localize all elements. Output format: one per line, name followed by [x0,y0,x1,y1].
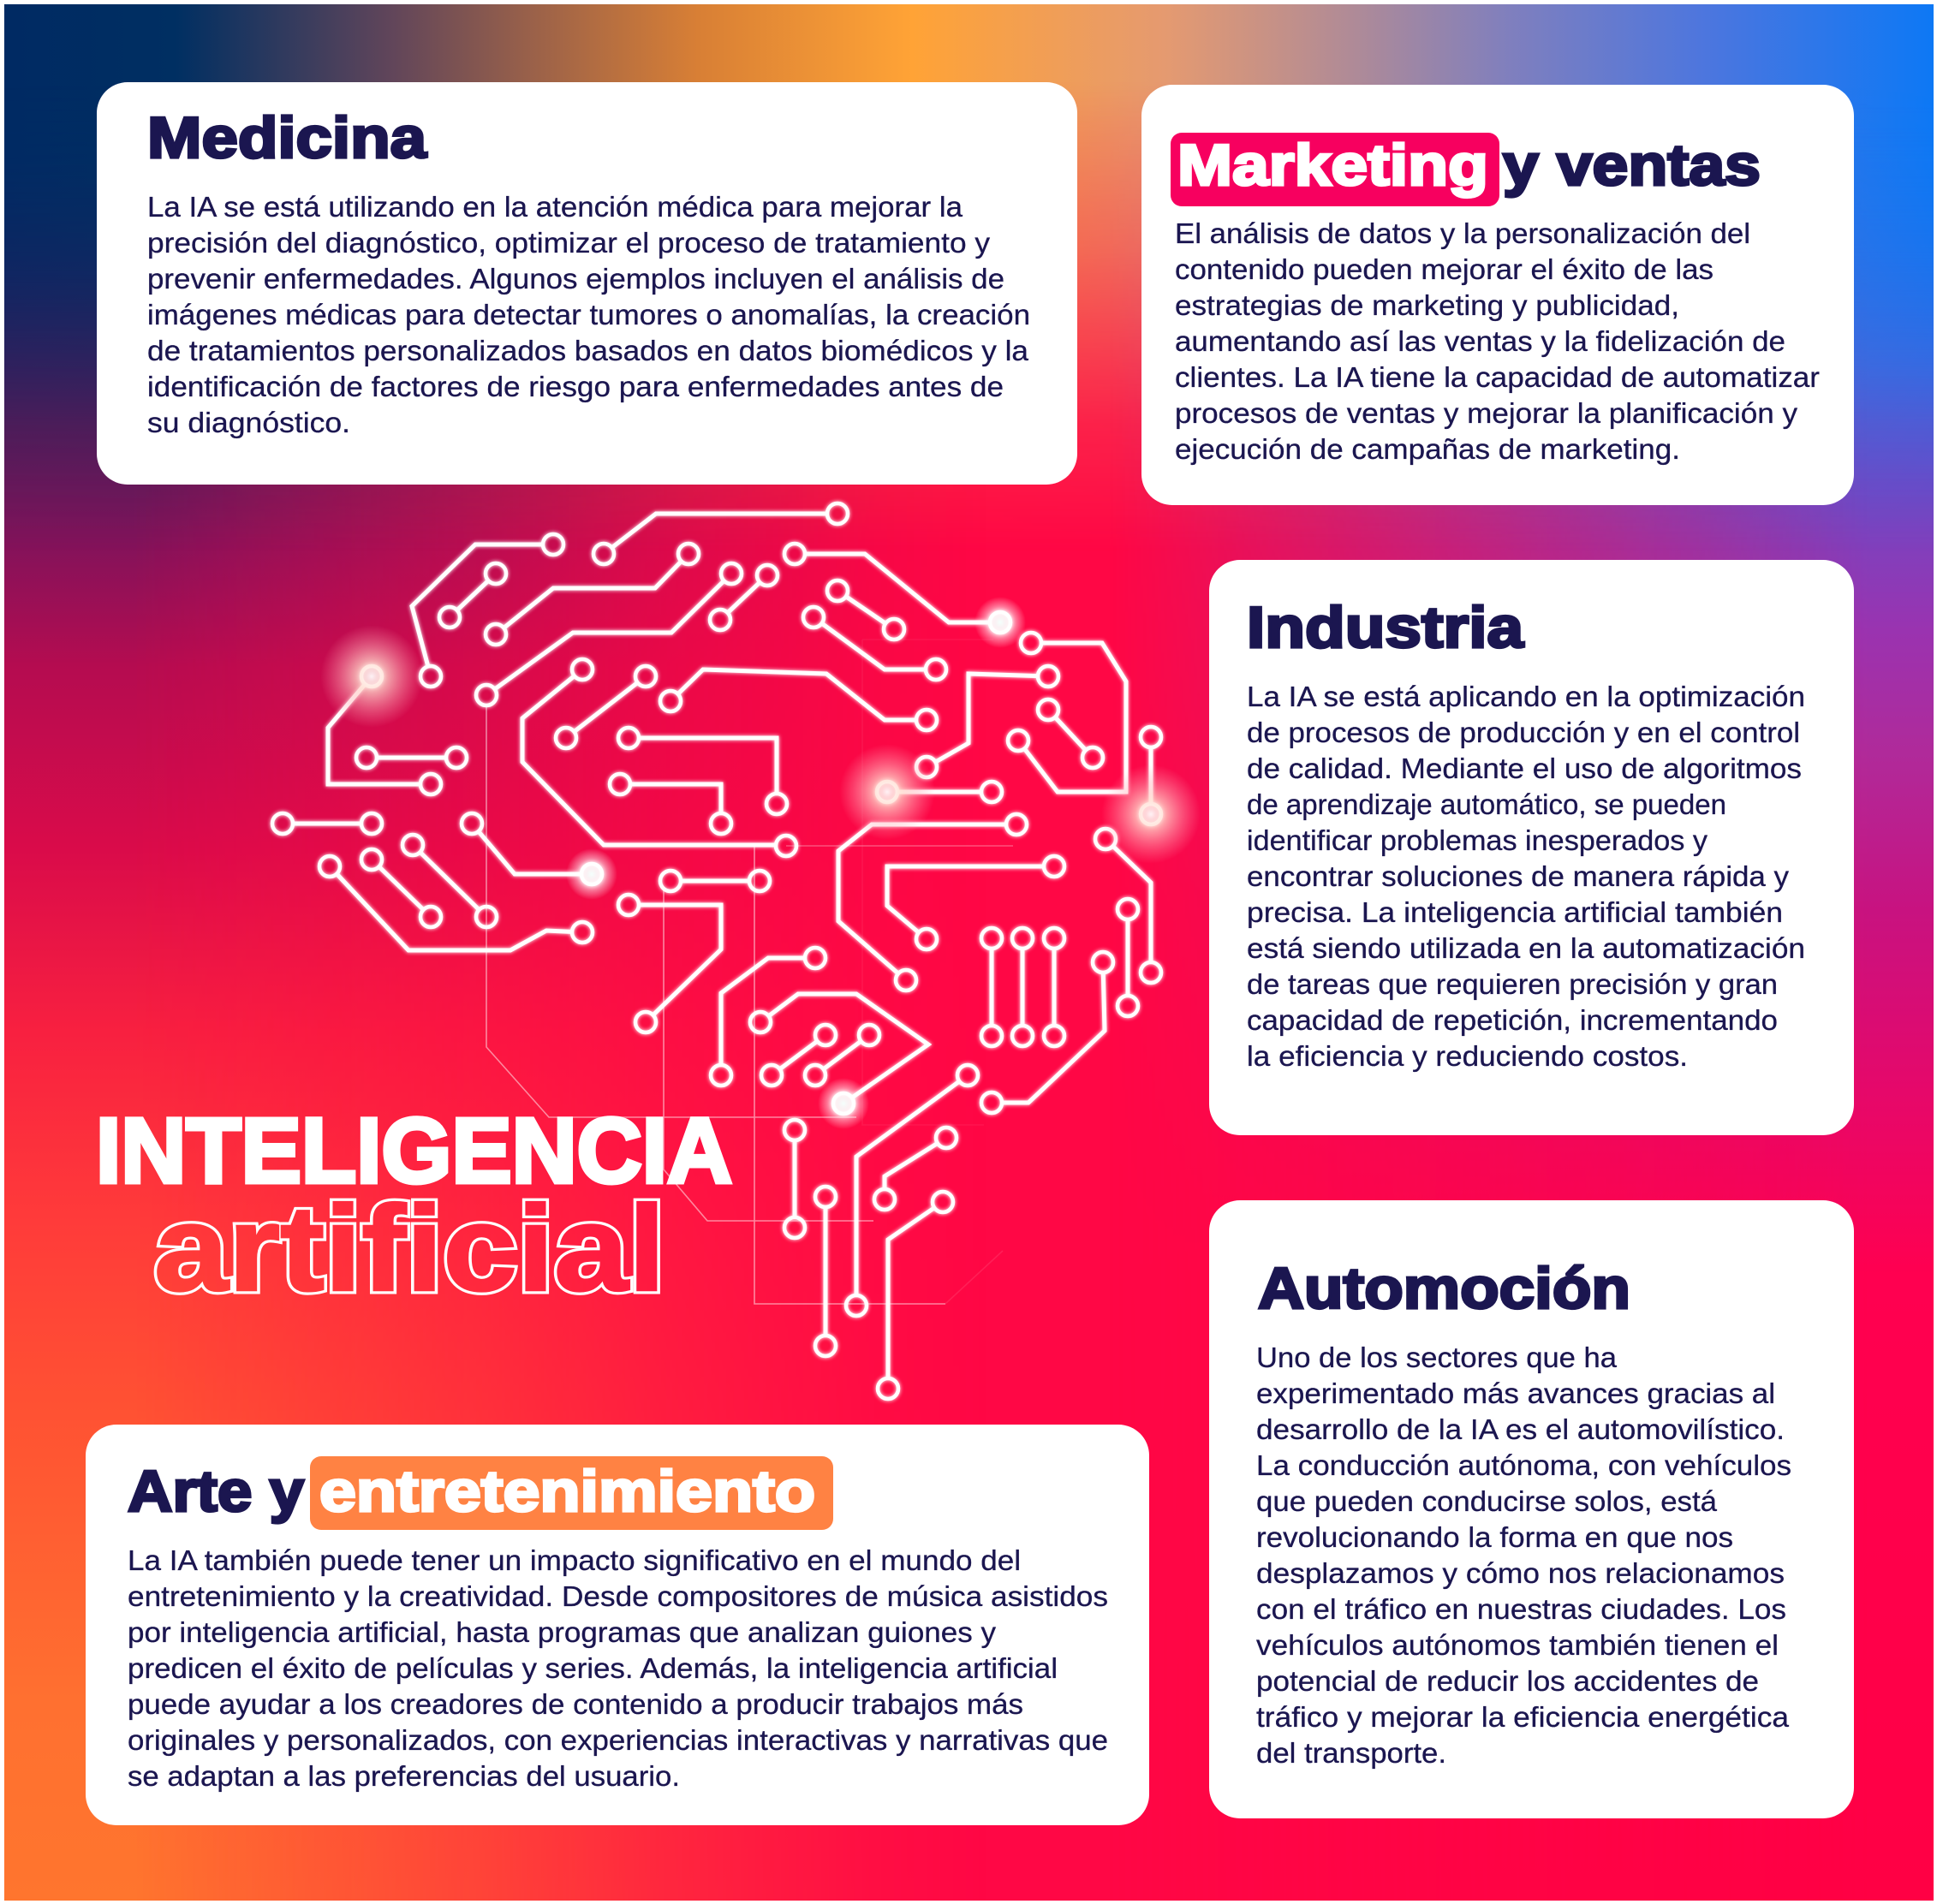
panel: Automoción [1209,1200,1854,1818]
faint background traces [486,640,1013,1304]
panel: Industria [1209,560,1854,1135]
text block: Industria: está siendo utilizada en la automatización [1247,932,1805,964]
text block: Automoción: desarrollo de la IA es el automovilístico. [1256,1413,1785,1445]
text block: Arte: originales y personalizados, con experiencias interactivas y narrativas que [128,1724,1108,1756]
title: artificial outline: artificial [154,1181,665,1317]
text block: Industria: de procesos de producción y en el control [1247,717,1800,748]
text block: Marketing: ejecución de campañas de marketing. [1175,433,1680,465]
main title [99,1116,733,1295]
text block: Marketing [1175,217,1820,465]
text block: Medicina: su diagnóstico. [147,407,350,438]
heading: Marketing: Marketing [1177,133,1488,198]
text block: Marketing: El análisis de datos y la personalización del [1175,217,1750,249]
text block: Automoción: Uno de los sectores que ha [1256,1342,1618,1373]
circuit traces [283,514,1151,1389]
heading highlight: Marketing [1171,133,1499,206]
text block: Medicina [147,191,1030,438]
text block: Industria: precisa. La inteligencia artificial también [1247,896,1783,928]
text block: Automoción: del transporte. [1256,1737,1446,1769]
text block: Automoción: potencial de reducir los accidentes de [1256,1665,1759,1697]
text block: Medicina: La IA se está utilizando en la atención médica para mejorar la [147,191,963,223]
text block: Medicina: identificación de factores de riesgo para enfermedades antes de [147,371,1004,402]
heading: y ventas: y ventas [1503,133,1761,198]
text block: Arte: La IA también puede tener un impacto significativo en el mundo del [128,1544,1021,1576]
text block: Automoción: con el tráfico en nuestras ciudades. Los [1256,1593,1786,1625]
brain circuit illustration [272,503,1201,1399]
heading highlight: entretenimiento [310,1456,833,1530]
text block: Automoción: revolucionando la forma en que nos [1256,1521,1733,1553]
heading: Arte y: Arte y [128,1459,304,1524]
text block: Arte: predicen el éxito de películas y series. Además, la inteligencia artificial [128,1652,1058,1684]
text block: Marketing: contenido pueden mejorar el éxito de las [1175,253,1714,285]
text block: Arte [128,1544,1108,1792]
text block: Medicina: imágenes médicas para detectar tumores o anomalías, la creación [147,299,1030,330]
text block: Automoción: que pueden conducirse solos, está [1256,1485,1718,1517]
text block: Automoción: La conducción autónoma, con vehículos [1256,1449,1791,1481]
heading: Industria: Industria [1247,595,1524,660]
text block: Industria: La IA se está aplicando en la optimización [1247,681,1805,712]
text block: Industria: encontrar soluciones de manera rápida y [1247,860,1790,892]
text block: Marketing: clientes. La IA tiene la capacidad de automatizar [1175,361,1820,393]
text block: Arte: por inteligencia artificial, hasta programas que analizan guiones y [128,1616,997,1648]
text block: Industria: identificar problemas inesperados y [1247,824,1708,856]
text block: Marketing: procesos de ventas y mejorar la planificación y [1175,397,1798,429]
text block: Industria: de aprendizaje automático, se pueden [1247,788,1726,820]
circuit nodes [272,503,1161,1399]
text block: Industria: capacidad de repetición, incrementando [1247,1004,1778,1036]
text block: Medicina: prevenir enfermedades. Algunos ejemplos incluyen el análisis de [147,263,1004,295]
heading: Medicina: Medicina [147,105,427,170]
glowing node highlights [320,597,1201,1129]
panel: Medicina [97,82,1077,485]
text block: Industria [1247,681,1805,1072]
text block: Medicina: precisión del diagnóstico, optimizar el proceso de tratamiento y [147,227,991,259]
text block: Arte: entretenimiento y la creatividad. Desde compositores de música asistidos [128,1580,1108,1612]
glowing circuit traces and nodes [272,503,1161,1399]
text block: Arte: se adaptan a las preferencias del usuario. [128,1760,680,1792]
text block: Automoción: desplazamos y cómo nos relacionamos [1256,1557,1785,1589]
panel: Arte y entretenimiento [86,1425,1149,1825]
text block: Marketing: aumentando así las ventas y la fidelización de [1175,325,1785,357]
text block: Arte: puede ayudar a los creadores de contenido a producir trabajos más [128,1688,1023,1720]
text block: Medicina: de tratamientos personalizados basados en datos biomédicos y la [147,335,1029,366]
text block: Automoción: experimentado más avances gracias al [1256,1377,1775,1409]
panel: Marketing y ventas [1141,85,1854,505]
heading: entretenimiento: entretenimiento [319,1459,815,1524]
text block: Industria: la eficiencia y reduciendo costos. [1247,1040,1688,1072]
text block: Industria: de tareas que requieren precisión y gran [1247,968,1778,1000]
heading: Automoción: Automoción [1258,1256,1630,1321]
text block: Automoción [1256,1342,1791,1769]
text block: Automoción: tráfico y mejorar la eficiencia energética [1256,1701,1790,1733]
title: INTELIGENCIA: INTELIGENCIA [96,1098,732,1202]
text block: Automoción: vehículos autónomos también tienen el [1256,1629,1779,1661]
text block: Industria: de calidad. Mediante el uso de algoritmos [1247,753,1802,784]
text block: Marketing: estrategias de marketing y publicidad, [1175,289,1679,321]
